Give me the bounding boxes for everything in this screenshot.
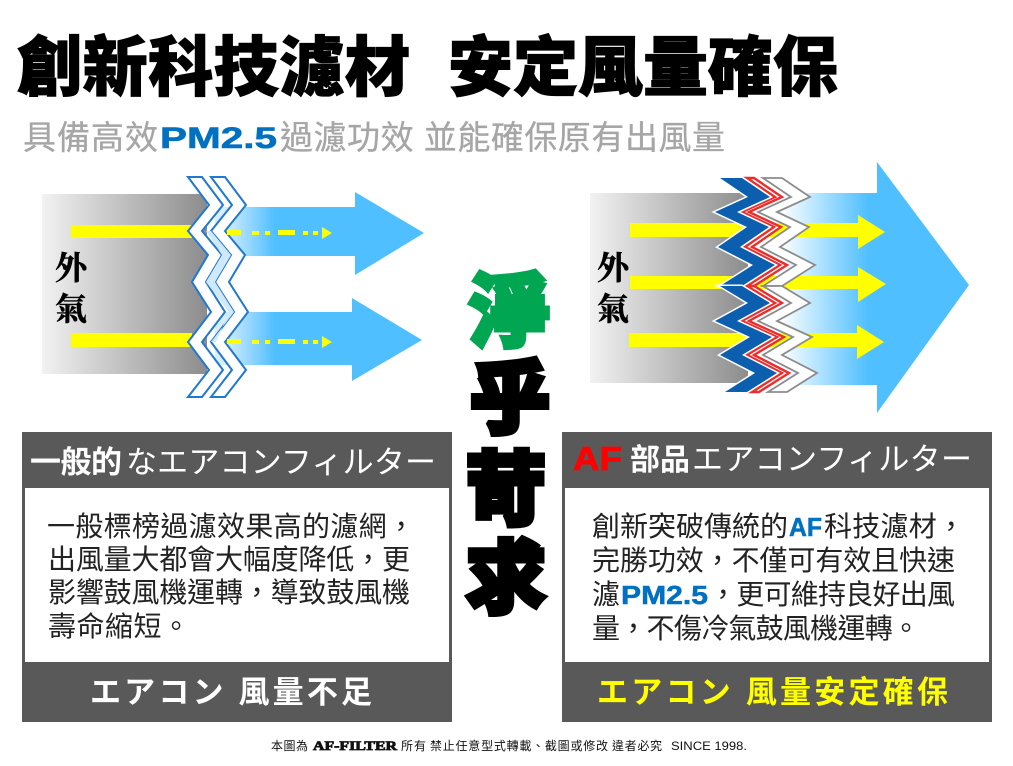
- panel body text: 一般標榜過濾效果高的濾網，: [47, 511, 415, 542]
- diagram: AF filter airflow: [590, 162, 969, 413]
- title: 創新科技濾材: [17, 31, 410, 104]
- yellow inflow bars: [71, 225, 192, 347]
- panel body text: PM2.5: [621, 580, 708, 610]
- panel body text: 濾: [592, 579, 620, 610]
- outside air label: 氣: [597, 291, 629, 327]
- filter layers: [188, 177, 248, 397]
- panel result: エアコン 風量不足: [90, 675, 372, 710]
- yellow dashed reduced flow arrow bottom: [227, 336, 332, 348]
- panel body text: 出風量大都會大幅度降低，更: [48, 544, 410, 575]
- subtitle: PM2.5: [160, 122, 277, 155]
- panel body text: ，更可維持良好出風: [709, 579, 955, 610]
- footer copyright: SINCE 1998.: [671, 739, 747, 753]
- center vertical slogan: 淨: [470, 268, 550, 357]
- blue outflow arrow top: [215, 192, 424, 275]
- center vertical slogan: 苛: [466, 446, 546, 535]
- panel heading: 部品: [630, 444, 690, 477]
- outside air label: 外: [55, 250, 90, 286]
- red filter layer: [742, 178, 789, 392]
- panel heading: なエアコンフィルター: [126, 445, 436, 480]
- panel body text: 量，不傷冷氣鼓風機運轉。: [592, 613, 920, 644]
- outside air label: [55, 250, 90, 327]
- subtitle: [23, 119, 725, 156]
- footer copyright: 所有: [401, 739, 426, 753]
- panel body text: 影響鼓風機運轉，導致鼓風機: [48, 577, 410, 608]
- title: 安定風量確保: [448, 31, 838, 104]
- center vertical slogan: [466, 268, 550, 624]
- panel body text: 科技濾材，: [824, 511, 965, 542]
- title: [17, 31, 838, 104]
- panel heading: AF: [573, 440, 622, 477]
- outside air gray block: [42, 194, 207, 374]
- footer copyright: [271, 738, 747, 753]
- panel heading: エアコンフィルター: [692, 442, 972, 477]
- panel body text: AF: [789, 512, 822, 542]
- panel result: エアコン 風量安定確保: [597, 675, 948, 710]
- panel heading: 一般的: [30, 445, 122, 480]
- outside air label: [597, 250, 632, 327]
- yellow dashed reduced flow arrow top: [227, 227, 332, 239]
- outside air gray block: [590, 193, 748, 383]
- footer copyright: AF-FILTER: [313, 738, 398, 753]
- center vertical slogan: 求: [466, 535, 546, 624]
- gray filter layer: [758, 178, 817, 392]
- center vertical slogan: 乎: [470, 355, 550, 444]
- blue filter layer: [715, 178, 777, 392]
- footer copyright: 禁止任意型式轉載、截圖或修改: [430, 738, 608, 753]
- outside air label: 外: [597, 250, 632, 286]
- outside air label: 氣: [55, 291, 87, 327]
- subtitle: 具備高效: [23, 119, 158, 156]
- panel heading: [573, 440, 972, 477]
- panel body text: 創新突破傳統的: [592, 511, 788, 542]
- footer copyright: 本圖為: [271, 739, 308, 753]
- panel body text: 壽命縮短。: [48, 611, 190, 642]
- panel: AF filter: [562, 432, 992, 722]
- panel body text: 完勝功效，不僅可有效且快速: [592, 545, 955, 576]
- yellow flow arrows: [629, 215, 886, 359]
- footer copyright: 違者必究: [612, 738, 662, 753]
- diagram: ordinary filter airflow: [42, 177, 424, 397]
- large blue outflow arrow: [745, 162, 969, 413]
- panel body text: [47, 511, 415, 642]
- panel: ordinary filter: [22, 432, 452, 722]
- blue outflow arrow bottom: [215, 298, 422, 381]
- panel body text: [592, 511, 965, 644]
- subtitle: 過濾功效 並能確保原有出風量: [280, 119, 725, 156]
